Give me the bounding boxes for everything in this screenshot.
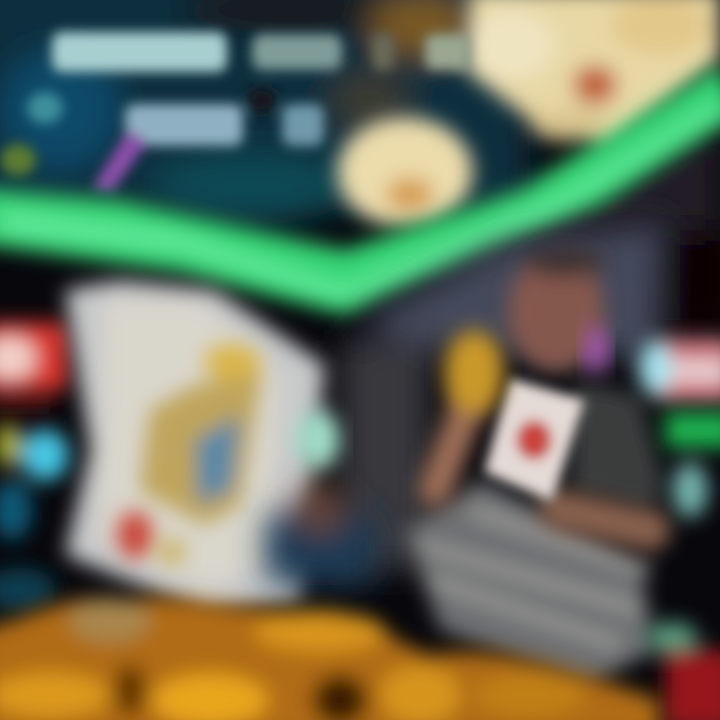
pink accent [584, 326, 608, 374]
icon: green and teal tiles right [646, 412, 720, 720]
icon: striped badge right [639, 338, 720, 402]
panel: grey-blue backdrop behind person [340, 220, 665, 570]
icon: red badge left [0, 322, 68, 414]
icon: cyan glow left [0, 423, 69, 612]
panel: playing card [65, 280, 325, 612]
panel: top banner background [0, 0, 530, 225]
panel: dark backdrop at right [400, 130, 720, 330]
presenter head [508, 247, 605, 372]
yellow object [444, 330, 504, 414]
illustration: golden chips foreground [0, 598, 660, 720]
banner: green chevron band [0, 65, 720, 315]
presenter trousers [405, 480, 655, 685]
held white card [484, 378, 585, 502]
presenter shirt [570, 380, 665, 510]
icon: popcorn piece centre [337, 117, 473, 227]
icon: card figure [117, 344, 262, 566]
illustration: presenter [405, 247, 665, 685]
heading: blurred title lines [0, 32, 470, 192]
illustration: small background figure [265, 482, 375, 585]
icon: popcorn pile top right [465, 0, 720, 150]
presenter arm [435, 400, 650, 530]
icon: mint glow by card [296, 410, 340, 470]
